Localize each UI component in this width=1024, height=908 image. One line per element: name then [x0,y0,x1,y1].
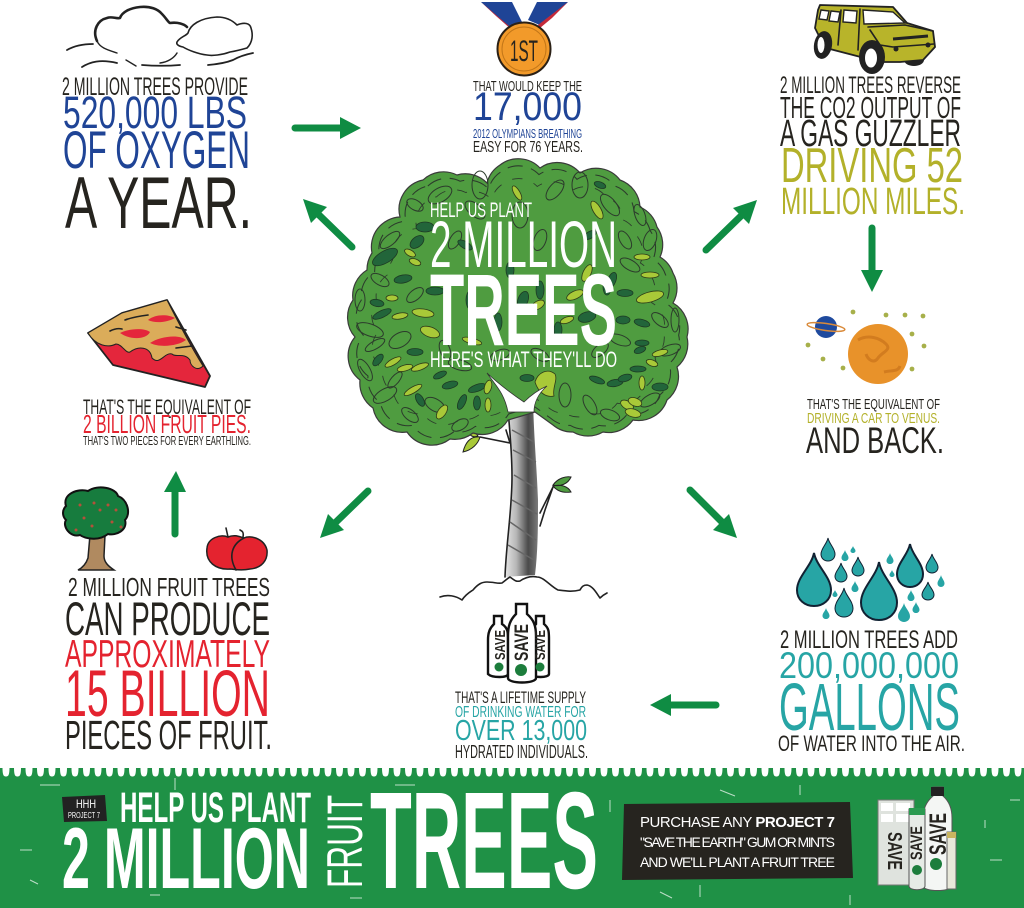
tree branches over canopy [487,373,547,412]
text: 2 million fruit trees: 2 MILLION FRUIT TREES [68,572,270,602]
text: help us plant: HELP US PLANT [120,784,311,832]
icon: water bottles: SAVE [512,624,533,661]
tree canopy [348,159,688,445]
text: a year: A YEAR. [65,163,252,244]
arrow: tree to gas guzzler [706,200,757,250]
icon: products: SAVE [907,826,926,860]
logo: project 7: PROJECT 7 [68,811,100,820]
panel: water [778,538,965,756]
leaves: lime [384,185,669,421]
arrow: fruit to pies [164,471,186,534]
icon: products: SAVE [883,832,905,870]
text: help us plant: HELP US PLANT [430,199,532,222]
text: over 13,000: OVER 13,000 [455,715,587,747]
text: 200,000,000: 200,000,000 [779,645,959,686]
text: of drinking water for: OF DRINKING WATER FOR [455,704,586,721]
text: 2012 olympians breathing: 2012 OLYMPIANS BREATHING [473,126,582,141]
panel: fruit pies [83,300,251,448]
text: driving a car to venus: DRIVING A CAR TO VENUS. [807,410,940,427]
panel: gas guzzler [780,5,965,223]
icon: apples [207,528,267,570]
text: here's what they'll do: HERE'S WHAT THEY'LL DO [430,347,617,372]
panel: olympians [473,2,583,156]
text: that's the equivalent of: THAT'S THE EQUIVALENT OF [807,396,940,413]
text: 520,000 lbs: 520,000 LBS [63,87,247,138]
text: pieces of fruit: PIECES OF FRUIT. [65,712,272,758]
arrow: water to drinking water [650,694,716,716]
banner: call to action [0,764,1024,908]
text: 2 million: 2 MILLION [62,811,310,907]
arrow: tree to water [690,490,737,538]
icon: water bottles: SAVE [492,630,509,660]
text: and back: AND BACK. [806,420,944,461]
icon: water bottles [488,604,549,682]
icon: suv [812,5,935,74]
text: that's a lifetime supply: THAT'S A LIFETIME SUPPLY [455,688,586,707]
leaves: dark [369,180,668,411]
text: 2 million trees provide: 2 MILLION TREES PROVIDE [62,73,248,101]
text: can produce: CAN PRODUCE [65,592,270,645]
banner background [0,768,1024,908]
tree trunk and ground [440,400,607,600]
icon: medal [481,2,568,76]
arrow: tree to fruit [320,491,368,538]
icon: saturn and venus with stars [806,310,926,384]
panel: drinking water [455,604,588,762]
leaves: outlines [355,171,682,434]
logo: project 7: HHH [76,797,96,811]
panel: venus [806,310,944,461]
text: that would keep the: THAT WOULD KEEP THE [473,78,582,95]
panel: fruit production [63,487,272,758]
text: 15 billion: 15 BILLION [65,656,270,730]
text: 17,000: 17,000 [473,85,582,129]
callout: purchase: PURCHASE ANY PROJECT 7 [640,814,835,831]
text: 2 billion fruit pies: 2 BILLION FRUIT PIES. [83,409,251,439]
text: approximately: APPROXIMATELY [65,633,270,676]
icon: water bottles: SAVE [532,630,549,660]
arrow: gas guzzler to venus [861,228,883,292]
text: hydrated individuals: HYDRATED INDIVIDUALS. [455,742,588,762]
icon: products [878,787,956,890]
arrow: tree to oxygen [303,199,352,247]
text: that's the equivalent of: THAT'S THE EQUIVALENT OF [83,396,251,419]
text: trees: TREES [430,253,617,367]
icon: fruit tree [63,487,128,570]
callout: purchase: "SAVE THE EARTH" GUM OR MINTS [640,834,835,850]
illustration: central tree [348,159,688,600]
text: of oxygen: OF OXYGEN [63,121,250,180]
callout: purchase [622,802,853,880]
panel: oxygen [62,7,253,244]
text: easy for 76 years: EASY FOR 76 YEARS. [473,139,583,156]
text: 2 million: 2 MILLION [430,207,617,281]
icon: water drops [797,538,944,622]
icon: medal: 1ST [510,35,538,68]
logo: project 7 [62,795,107,822]
icon: products: SAVE [925,813,952,855]
icon: clouds [67,7,253,67]
text: fruit vertical: FRUIT [317,795,373,888]
callout: purchase: AND WE'LL PLANT A FRUIT TREE [640,854,835,870]
icon: pie slice [88,300,210,387]
text: two pieces for every earthling: THAT'S TWO PIECES FOR EVERY EARTHLING. [83,434,251,448]
arrow: oxygen to olympians [295,117,361,139]
